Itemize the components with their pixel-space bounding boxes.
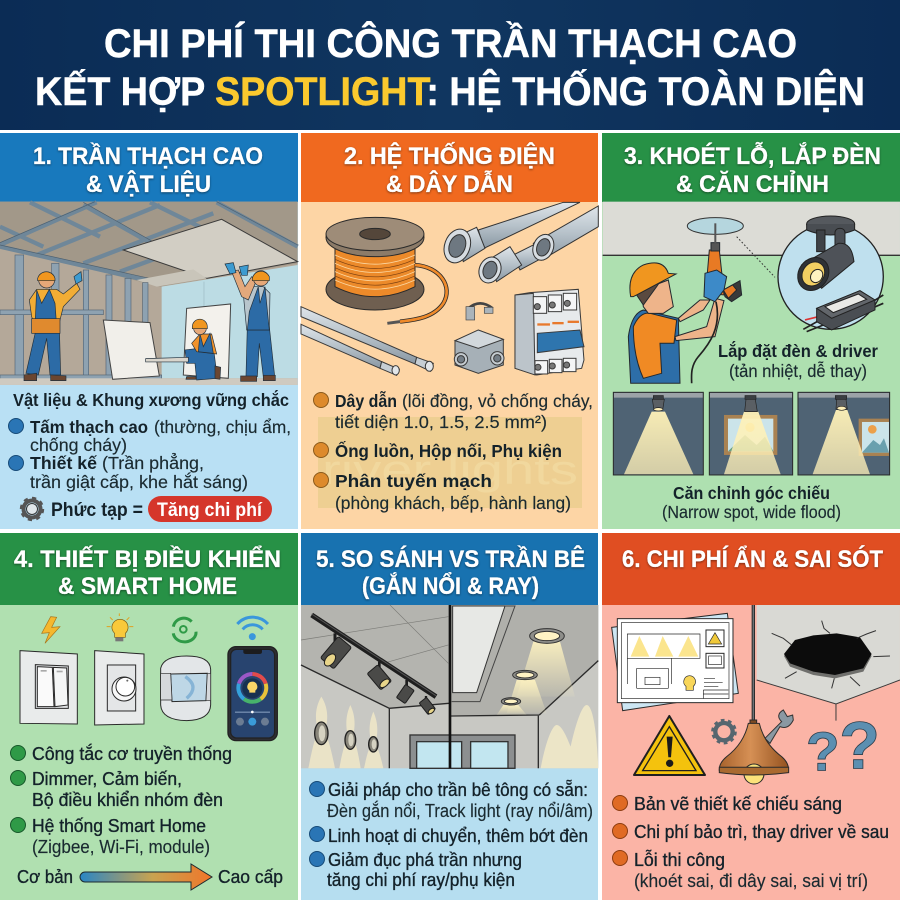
panel 2: hệ thống điện & dây dẫn (301, 133, 598, 529)
bullet: tấm thạch cao (8, 417, 291, 455)
panel 4: thiết bị điều khiển & smart home (0, 533, 298, 900)
bullet: phân tuyến mạch: Phân tuyến mạch (335, 471, 492, 491)
panel 3 header (602, 133, 900, 202)
blueprint (612, 613, 738, 711)
worker left (24, 272, 82, 381)
bullet: tấm thạch cao: Tấm thạch cao (30, 417, 148, 437)
icon: rotation sensor (173, 618, 196, 642)
smartphone app (228, 647, 277, 741)
illustration: hidden costs (612, 605, 900, 784)
panel 2 header: & DÂY DẪN (386, 169, 513, 198)
bullet: smart home: (Zigbee, Wi-Fi, module) (32, 837, 210, 857)
badge: tăng chi phí: Tăng chi phí (157, 500, 263, 521)
bullet: phân tuyến mạch (314, 471, 571, 513)
panel 1 subheading: Vật liệu & Khung xương vững chắc (13, 389, 289, 410)
watermark (318, 417, 582, 508)
illustration: workers installing ceiling (0, 202, 298, 385)
recessed lights (501, 629, 564, 705)
illustration: drilling and fixtures (603, 202, 900, 475)
icon: bulb (107, 613, 133, 641)
panel 2 header (301, 133, 598, 202)
arrow: basic to premium (80, 864, 212, 890)
ceiling glow (497, 642, 575, 715)
scale label: cơ bản: Cơ bản (17, 867, 73, 887)
label: căn chỉnh góc chiếu (662, 483, 841, 522)
panel 6 header (602, 533, 900, 605)
bullet: dây dẫn: Dây dẫn (335, 390, 397, 411)
panel 1: trần thạch cao & vật liệu (0, 133, 298, 529)
bullet: dây dẫn (314, 390, 593, 432)
panel 1 header (0, 133, 298, 202)
label: lắp đặt đèn & driver: (tản nhiệt, dễ thay) (729, 360, 867, 381)
panel 4 header: & SMART HOME (58, 573, 237, 600)
panel 2 header: 2. HỆ THỐNG ĐIỆN (344, 142, 555, 170)
panel 1 header: 1. TRẦN THẠCH CAO (33, 142, 263, 170)
bullet: dimmer, cảm biến: Dimmer, Cảm biến, (32, 769, 182, 789)
worker with drill (628, 223, 742, 383)
bullet: smart home (10, 816, 210, 857)
bullet: thiết kế: (Trần phẳng, (102, 452, 204, 473)
title line 1: CHI PHÍ THI CÔNG TRẦN THẠCH CAO (104, 20, 797, 66)
worker right (225, 263, 275, 381)
bullet: giải pháp (310, 780, 593, 821)
bullet: giảm đục phá (310, 850, 522, 890)
panel 3 header: & CĂN CHỈNH (676, 169, 829, 198)
bullet: dây dẫn: (lõi đồng, vỏ chống cháy, (402, 391, 593, 411)
pendant lamp (719, 605, 789, 784)
question marks (806, 709, 880, 783)
driver box (803, 291, 883, 332)
clamp (468, 303, 493, 308)
spotlight detail circle (778, 224, 883, 329)
illustration: surface and track lights (301, 605, 598, 768)
beam angle panels (613, 392, 890, 475)
track spotlights (320, 633, 436, 715)
icon: wifi (237, 617, 268, 639)
gear (713, 720, 735, 743)
panel 4 header: 4. THIẾT BỊ ĐIỀU KHIỂN (14, 545, 281, 573)
icon: lightning (42, 617, 60, 643)
bullet: dây dẫn: tiết diện 1.0, 1.5, 2.5 mm²) (335, 412, 547, 432)
bullet: giảm đục phá: tăng chi phí ray/phụ kiện (327, 870, 515, 890)
bullet: giải pháp: Giải pháp cho trần bê tông có sẵn: (328, 780, 588, 800)
wall boards (103, 304, 231, 379)
bullet: tấm thạch cao: chống cháy) (30, 435, 127, 455)
panel 3 header: 3. KHOÉT LỖ, LẮP ĐÈN (624, 141, 881, 170)
cracked ceiling (757, 605, 900, 721)
bullet: lỗi thi công: (khoét sai, đi dây sai, sai vị trí) (634, 871, 868, 891)
label: lắp đặt đèn & driver (718, 340, 878, 381)
bullet: lỗi thi công (612, 849, 868, 891)
bullet: công tắc cơ: Công tắc cơ truyền thống (32, 743, 232, 764)
motion sensor (161, 656, 211, 721)
bullet: dimmer, cảm biến: Bộ điều khiển nhóm đèn (32, 790, 223, 810)
title banner (0, 0, 900, 130)
watermark: river lights (322, 446, 578, 493)
bullet: thiết kế (8, 452, 248, 492)
title line 2: KẾT HỢP SPOTLIGHT: HỆ THỐNG TOÀN DIỆN (35, 68, 865, 114)
panel 5 header (301, 533, 598, 605)
panel 6 header: 6. CHI PHÍ ẨN & SAI SÓT (622, 545, 883, 573)
panel 5: so sánh vs trần bê (301, 533, 598, 900)
conduits with couplers (439, 202, 598, 286)
bullet: smart home: Hệ thống Smart Home (32, 816, 206, 836)
complexity label: Phức tạp = (51, 500, 143, 521)
bullet: linh hoạt: Linh hoạt di chuyển, thêm bớt đèn (328, 826, 588, 846)
illustration: control devices (20, 613, 277, 741)
thin pipes (301, 307, 433, 375)
bullet: lỗi thi công: Lỗi thi công (634, 849, 725, 870)
panel 5 header: 5. SO SÁNH VS TRẦN BÊ (316, 545, 585, 573)
warning sign (634, 716, 705, 775)
bullet: tấm thạch cao: (thường, chịu ẩm, (154, 417, 291, 437)
track rail (312, 615, 436, 697)
bullet: phân tuyến mạch: (phòng khách, bếp, hành lang) (335, 493, 571, 513)
bullet: giảm đục phá: Giảm đục phá trần nhưng (328, 850, 522, 870)
circuit breaker (515, 289, 584, 375)
label: căn chỉnh góc chiếu: Căn chỉnh góc chiếu (673, 483, 830, 503)
question marks: ? (839, 709, 880, 783)
icon: gear (22, 498, 42, 520)
bullet: dimmer, cảm biến (10, 769, 223, 810)
worker kneeling (146, 319, 221, 380)
label: căn chỉnh góc chiếu: (Narrow spot, wide flood) (662, 502, 841, 522)
window (410, 735, 515, 768)
illustration: electrical materials (301, 202, 598, 375)
dimmer (95, 651, 144, 725)
scale label: cao cấp: Cao cấp (218, 867, 283, 887)
bullet: ống luồn: Ống luồn, Hộp nối, Phụ kiện (335, 440, 562, 461)
panel 6: chi phí ẩn & sai sót (602, 533, 900, 900)
question marks: ? (806, 721, 840, 783)
bullet: giải pháp: Đèn gắn nổi, Track light (ray nổi/âm) (327, 800, 593, 821)
bullet: thiết kế: Thiết kế (30, 453, 97, 473)
panel 1 header: & VẬT LIỆU (86, 170, 211, 198)
label: lắp đặt đèn & driver: Lắp đặt đèn & driver (718, 340, 878, 361)
bullet: bản vẽ: Bản vẽ thiết kế chiếu sáng (634, 794, 842, 814)
cable spool (326, 217, 424, 310)
bullet: chi phí bảo trì: Chi phí bảo trì, thay driver về sau (634, 822, 889, 842)
wall arcs of light, right (541, 705, 598, 768)
panel 3: khoét lỗ, lắp đèn & căn chỉnh (602, 133, 900, 529)
wrench (765, 710, 793, 743)
bullet: thiết kế: trần giật cấp, khe hắt sáng) (30, 471, 248, 492)
wall lights (308, 697, 383, 768)
junction box (454, 330, 504, 373)
panel 4 header (0, 533, 298, 605)
double switch (20, 651, 77, 724)
panel 5 header: (GẮN NỔI & RAY) (362, 572, 539, 600)
